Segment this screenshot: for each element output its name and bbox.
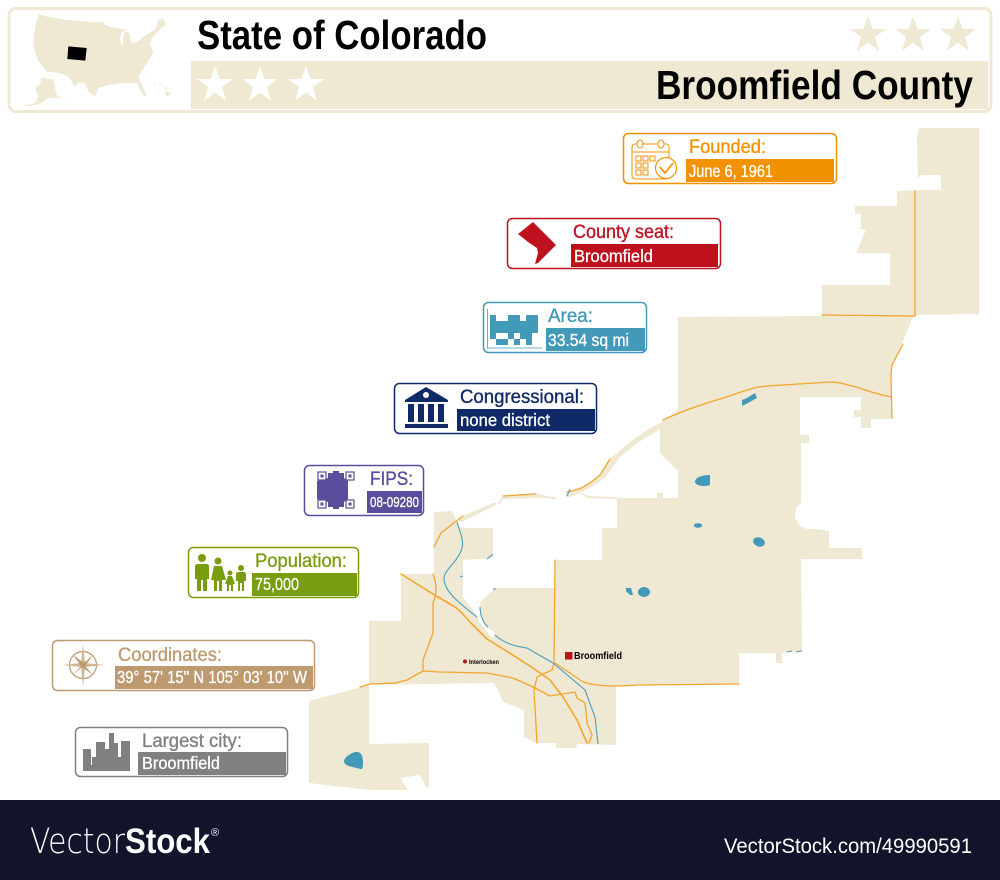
value: 33.54 sq mi bbox=[548, 330, 629, 350]
river bbox=[444, 489, 802, 744]
logo: VectorStock: Vector bbox=[30, 822, 126, 862]
value: 08-09280 bbox=[370, 494, 419, 511]
value: Broomfield bbox=[142, 753, 220, 773]
county land area bbox=[309, 128, 979, 790]
label: County seat: bbox=[573, 221, 674, 243]
county map bbox=[309, 128, 979, 790]
icon: city skyline bbox=[83, 733, 130, 771]
value: Broomfield bbox=[574, 246, 653, 266]
logo: VectorStock bbox=[30, 822, 219, 862]
card: Coordinates bbox=[52, 640, 314, 690]
label: Population: bbox=[255, 550, 347, 572]
card: Area bbox=[484, 302, 646, 352]
icon: area grid bbox=[488, 309, 542, 348]
value: 39° 57' 15'' N 105° 03' 10'' W bbox=[117, 667, 307, 687]
value: June 6, 1961 bbox=[689, 161, 773, 181]
label: Coordinates: bbox=[118, 644, 222, 666]
header ribbon bbox=[191, 61, 988, 109]
label: Largest city: bbox=[142, 730, 242, 752]
label: Congressional: bbox=[460, 386, 584, 408]
icon: government building bbox=[405, 387, 448, 428]
header panel bbox=[9, 8, 991, 112]
beige stars top right bbox=[850, 16, 976, 51]
lakes bbox=[344, 393, 766, 769]
label: Founded: bbox=[689, 136, 766, 158]
white stars on ribbon bbox=[197, 66, 324, 101]
card: Largest city bbox=[76, 728, 288, 776]
marker: Broomfield: Broomfield bbox=[574, 651, 622, 662]
marker: Interlocken: Interlocken bbox=[469, 659, 499, 666]
icon: QR style chip bbox=[317, 471, 354, 509]
roads bbox=[360, 191, 915, 743]
label: FIPS: bbox=[370, 468, 413, 490]
logo: VectorStock: ® bbox=[211, 827, 219, 839]
value: none district bbox=[460, 410, 550, 430]
icon: county seat shape bbox=[518, 222, 556, 264]
image id: VectorStock.com/49990591 bbox=[724, 835, 972, 858]
title: State of Colorado: State of Colorado bbox=[197, 12, 487, 58]
card: County seat bbox=[508, 218, 720, 268]
logo: VectorStock: Stock bbox=[125, 822, 210, 861]
card: Congressional bbox=[394, 384, 596, 434]
value: 75,000 bbox=[255, 574, 299, 594]
card: FIPS bbox=[304, 466, 424, 516]
card: Founded bbox=[624, 134, 836, 184]
icon: calendar bbox=[632, 140, 676, 179]
icon: compass rose bbox=[62, 644, 104, 686]
footer bar bbox=[0, 800, 1000, 880]
icon: USA locator map bbox=[20, 14, 171, 106]
card: Population bbox=[188, 548, 358, 598]
icon: family bbox=[195, 554, 246, 591]
label: Area: bbox=[548, 305, 593, 327]
